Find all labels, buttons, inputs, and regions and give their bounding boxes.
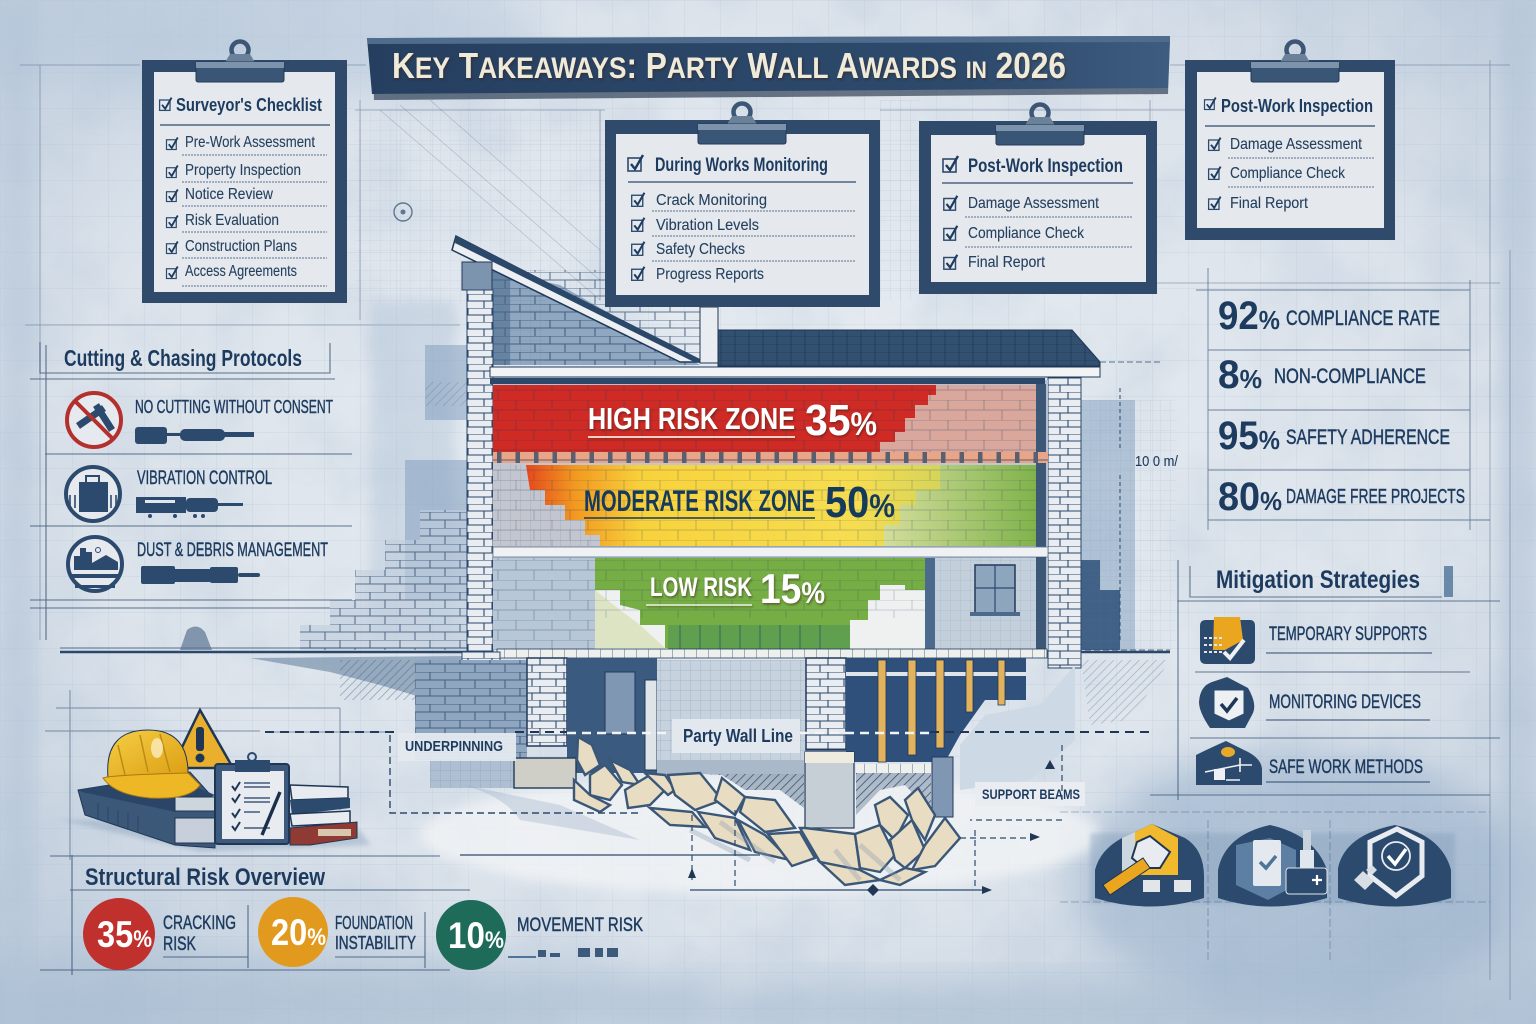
item: monitoring devices: MONITORING DEVICES: [1269, 692, 1421, 713]
panel: surveyor's checklist: [142, 42, 347, 303]
left sketch wash behind house: [300, 300, 1175, 650]
item: no cutting without consent: [67, 393, 333, 447]
stat: compliance rate: 92%: [1218, 294, 1280, 338]
item: temporary supports: [1200, 617, 1432, 664]
floor slab: [493, 547, 1048, 557]
moderate risk label: 50%: [825, 478, 895, 527]
icon: cutter tool: [135, 427, 254, 444]
panel: surveyor's checklist: Construction Plans: [185, 238, 297, 255]
label: underpinning: [398, 733, 516, 761]
roof: gable: [452, 236, 718, 365]
icon: shield check: [1338, 825, 1451, 906]
low risk label: LOW RISK: [650, 572, 752, 602]
stat: foundation instability: [258, 897, 416, 967]
label: support beams: [975, 782, 1085, 806]
high risk label: HIGH RISK ZONE: [588, 401, 795, 436]
stat: damage free projects: 80%: [1218, 475, 1282, 519]
stat: compliance rate: [1218, 294, 1440, 338]
panel: during works monitoring: [605, 104, 880, 307]
item: safe work methods: [1196, 741, 1430, 785]
panel: cutting and chasing protocols: [30, 342, 352, 640]
walls: [467, 290, 493, 668]
stat: non-compliance: NON-COMPLIANCE: [1274, 365, 1426, 388]
icon: vibration tool: [136, 497, 243, 518]
icon row: tools and protection: [1060, 812, 1490, 960]
stat: foundation instability: FOUNDATION: [335, 913, 413, 933]
stat: foundation instability: 20%: [271, 912, 326, 953]
moderate risk zone: [493, 463, 1046, 548]
panel: during works monitoring: Crack Monitoring: [656, 192, 767, 209]
high risk zone: [493, 384, 1048, 463]
panel: structural risk overview: [40, 855, 643, 975]
icon: debris tool: [141, 566, 260, 584]
eave: [490, 367, 1100, 377]
icon: checklist clipboard: [215, 753, 289, 844]
panel: surveyor's checklist: Notice Review: [185, 186, 273, 203]
panel: surveyor's checklist: Property Inspection: [185, 162, 301, 179]
icon: gold support props: [878, 660, 1005, 762]
moderate risk label: [584, 478, 895, 527]
heading: Mitigation Strategies: [1216, 566, 1420, 594]
panel: post-work inspection right: Damage Assessment: [1230, 136, 1362, 153]
icon: server box: [78, 772, 215, 848]
stat: cracking risk: 35%: [97, 914, 152, 955]
panel: post-work inspection centre: [919, 104, 1157, 294]
panel: post-work inspection centre: Compliance Check: [968, 225, 1085, 242]
panel: during works monitoring: Progress Reports: [656, 266, 764, 283]
stat: movement risk: [436, 900, 643, 970]
panel: post-work inspection centre: Post-Work Inspection: [968, 156, 1123, 177]
heading: Structural Risk Overview: [85, 864, 325, 891]
stat: movement risk: 10%: [448, 915, 504, 956]
label: height dimension: [1085, 362, 1179, 650]
rubble: [574, 737, 960, 885]
panel: post-work inspection centre: Final Report: [968, 254, 1045, 271]
item: dust and debris management: [68, 537, 328, 591]
label: underpinning: UNDERPINNING: [405, 738, 503, 755]
panel: surveyor's checklist: Surveyor's Checklist: [176, 95, 322, 115]
high risk label: 35%: [805, 396, 877, 445]
moderate risk label: MODERATE RISK ZONE: [584, 485, 815, 518]
icon: shield and device: [1218, 825, 1327, 906]
high risk label: [588, 396, 877, 445]
item: dust and debris management: DUST & DEBRIS MANAGEMENT: [137, 540, 328, 561]
ground line: [60, 626, 1170, 725]
house cross-section: [452, 236, 1100, 668]
panel: surveyor's checklist: Pre-Work Assessment: [185, 134, 315, 151]
panel: during works monitoring: During Works Monitoring: [655, 155, 828, 176]
dimension arrows: [390, 735, 1062, 896]
heading: Cutting & Chasing Protocols: [64, 345, 302, 371]
low risk label: 15%: [760, 565, 825, 612]
stat: safety adherence: 95%: [1218, 414, 1280, 458]
icon: warning triangle: [172, 710, 233, 768]
stat: damage free projects: [1218, 475, 1465, 519]
stat: movement risk: MOVEMENT RISK: [517, 915, 643, 936]
label: party wall line: [672, 719, 800, 753]
stat: compliance rate: COMPLIANCE RATE: [1286, 307, 1440, 330]
panel: surveyor's checklist: Access Agreements: [185, 263, 297, 280]
panel: post-work inspection right: Post-Work Inspection: [1221, 96, 1373, 116]
stat: safety adherence: SAFETY ADHERENCE: [1286, 426, 1450, 449]
label: height dimension: 10 0 m/: [1135, 453, 1179, 470]
label: party wall line: Party Wall Line: [683, 726, 793, 746]
roof: flat section: [718, 330, 1100, 366]
basement and foundations: [415, 652, 1100, 895]
item: temporary supports: TEMPORARY SUPPORTS: [1269, 624, 1427, 645]
illustration: safety kit: [45, 690, 390, 860]
panel: compliance statistics: [1196, 268, 1490, 530]
stat: cracking risk: RISK: [163, 934, 196, 955]
stat: foundation instability: INSTABILITY: [335, 933, 416, 953]
panel: surveyor's checklist: Risk Evaluation: [185, 212, 279, 229]
panel: post-work inspection centre: Damage Assessment: [968, 195, 1099, 212]
stat: cracking risk: CRACKING: [163, 913, 236, 934]
item: vibration control: VIBRATION CONTROL: [137, 468, 272, 489]
panel: during works monitoring: Vibration Levels: [656, 217, 759, 234]
item: no cutting without consent: NO CUTTING WITHOUT CONSENT: [135, 397, 333, 417]
title banner: [367, 36, 1170, 100]
stat: cracking risk: [83, 898, 236, 970]
panel: during works monitoring: Safety Checks: [656, 241, 745, 258]
item: vibration control: [66, 467, 272, 521]
panel: post-work inspection right: [1185, 42, 1395, 240]
item: monitoring devices: [1199, 677, 1430, 728]
low risk label: [646, 565, 825, 612]
stat: non-compliance: 8%: [1218, 353, 1262, 397]
stat: safety adherence: [1218, 414, 1450, 458]
panel: post-work inspection right: Final Report: [1230, 195, 1308, 212]
title text: KEY TAKEAWAYS: PARTY WALL AWARDS IN 2026: [392, 45, 1066, 86]
icon: stacked books: [290, 785, 357, 845]
low risk zone: [493, 557, 1046, 650]
label: support beams: SUPPORT BEAMS: [982, 786, 1080, 802]
panel: post-work inspection right: Compliance Check: [1230, 165, 1346, 182]
base band: [497, 649, 1047, 658]
icon: torch tool: [1095, 824, 1204, 906]
party wall line dashes: [265, 732, 1150, 733]
item: safe work methods: SAFE WORK METHODS: [1269, 757, 1423, 778]
stat: non-compliance: [1218, 353, 1426, 397]
icon: hard hat: [103, 730, 200, 798]
panel: mitigation strategies: [1150, 560, 1500, 800]
